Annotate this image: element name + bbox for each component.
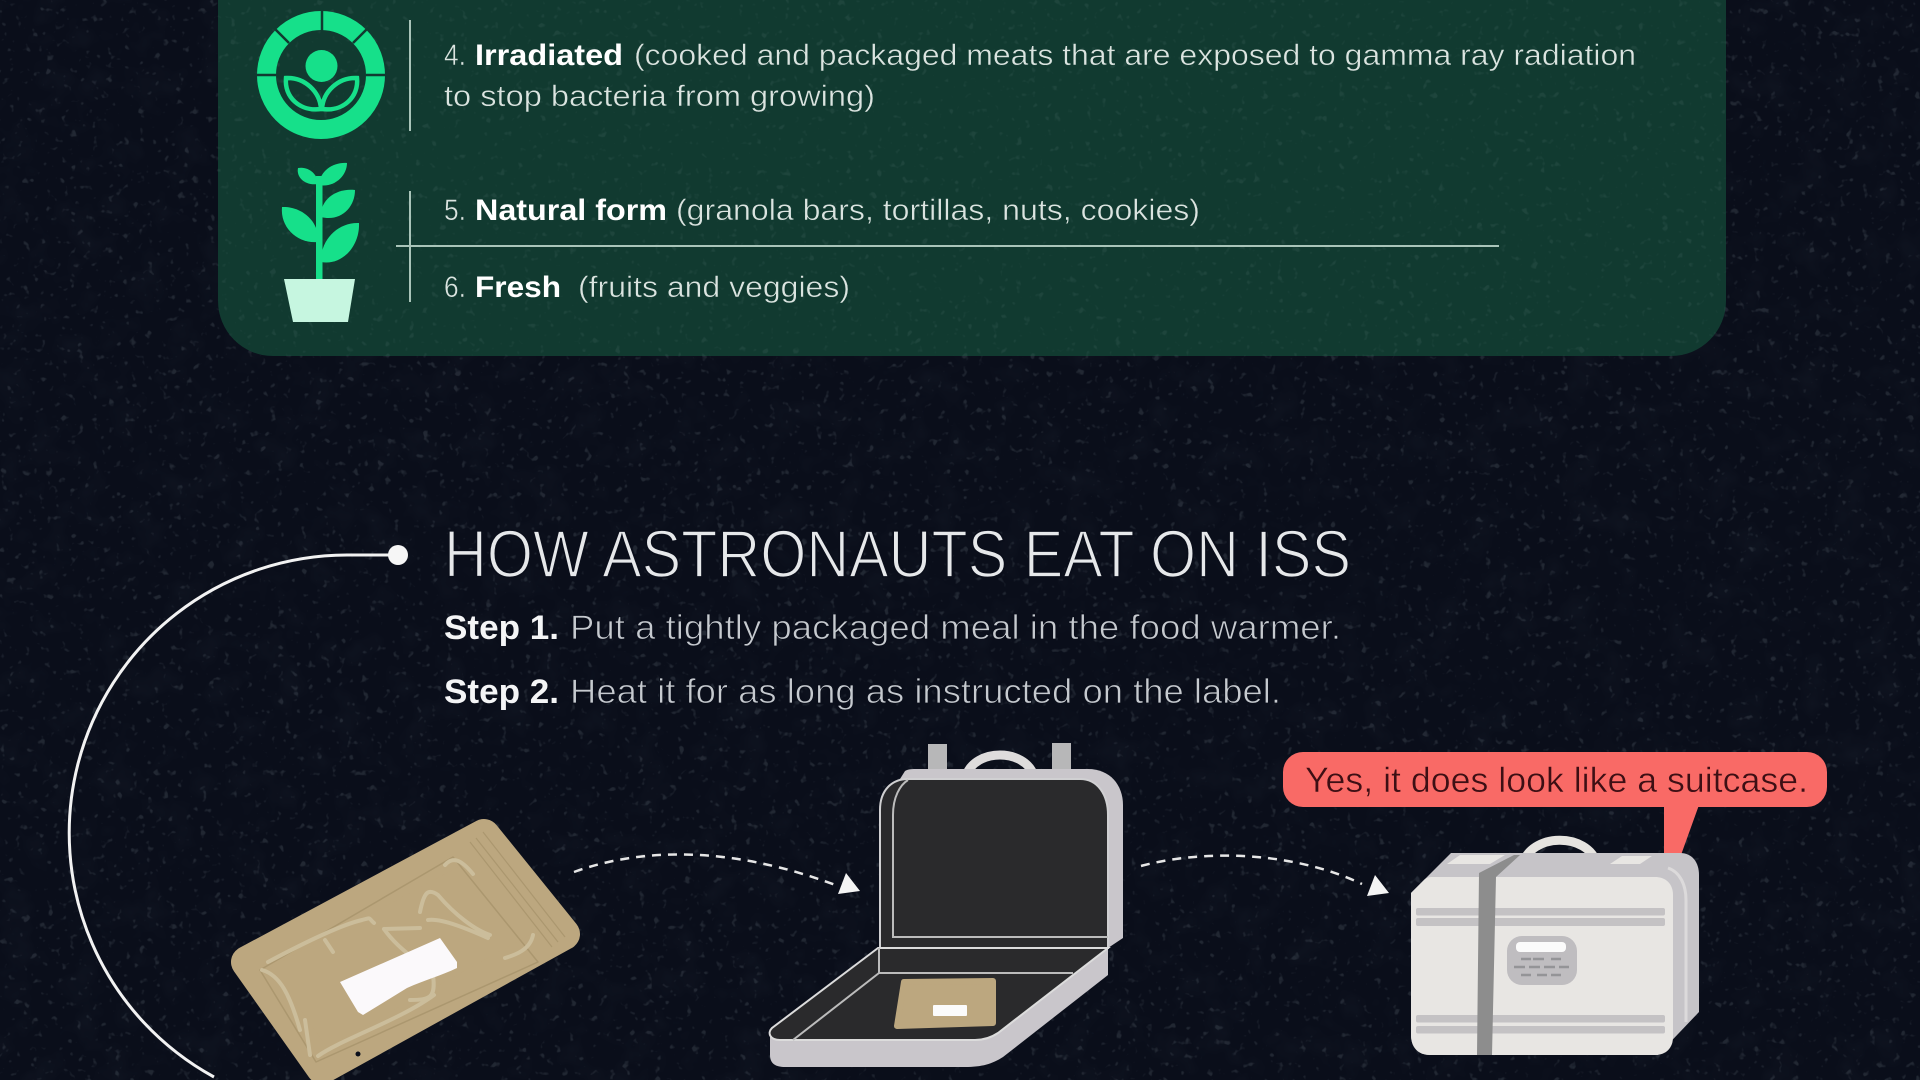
warmer handle and latches	[928, 743, 1071, 776]
suitcase handle	[1522, 840, 1597, 866]
suitcase front	[1411, 877, 1673, 1055]
callout: speech bubble: Yes, it does look like a suitcase.	[1305, 761, 1808, 800]
mini pouch	[897, 981, 993, 1026]
text: item 5 natural form: (granola bars, tortillas, nuts, cookies)	[676, 194, 1200, 227]
arrow: pouch to warmer	[574, 854, 860, 894]
text: item 4 irradiated: Irradiated	[475, 39, 623, 72]
icon: radura irradiation symbol	[254, 8, 388, 130]
warmer lid	[900, 769, 1123, 948]
icon: food pouch	[247, 832, 565, 1068]
suitcase shell	[1411, 853, 1699, 1055]
arc connector with dot	[69, 545, 408, 1077]
warmer base	[770, 948, 1108, 1067]
text: item 6 fresh: Fresh	[475, 271, 561, 304]
text: item 6 fresh	[444, 271, 850, 304]
icon: closed suitcase warmer	[1411, 840, 1699, 1055]
text: step 2: Heat it for as long as instructed on the label.	[570, 673, 1281, 711]
text: item 5 natural form	[444, 194, 1200, 227]
text: step 1: Put a tightly packaged meal in the food warmer.	[570, 609, 1341, 647]
panel: food types	[218, 0, 1726, 356]
text: item 6 fresh: (fruits and veggies)	[578, 271, 850, 304]
icon: potted plant	[282, 163, 359, 322]
divider: item 4	[409, 20, 411, 131]
suitcase strap	[1477, 855, 1520, 1055]
text: item 4 irradiated: 4.	[444, 39, 466, 72]
suitcase ridges	[1416, 908, 1665, 1034]
text: item 4 irradiated	[444, 39, 1636, 113]
text: item 4 irradiated: (cooked and packaged meats that are exposed to gamma ray radiation	[634, 39, 1636, 72]
callout: speech bubble	[1283, 752, 1827, 855]
heading: how astronauts eat: HOW ASTRONAUTS EAT ON ISS	[444, 517, 1351, 592]
text: step 2: Step 2.	[444, 673, 559, 711]
text: item 5 natural form: Natural form	[475, 194, 667, 227]
text: item 5 natural form: 5.	[444, 194, 466, 227]
suitcase lock	[1507, 936, 1577, 985]
divider: between items 5 and 6	[396, 245, 1499, 247]
text: item 4 irradiated: to stop bacteria from growing)	[444, 80, 875, 113]
arrow: warmer to suitcase	[1141, 856, 1389, 896]
divider: items 5 and 6	[409, 191, 411, 302]
text: item 6 fresh: 6.	[444, 271, 466, 304]
text: step 1: Step 1.	[444, 609, 559, 647]
icon: open food warmer	[770, 743, 1123, 1067]
